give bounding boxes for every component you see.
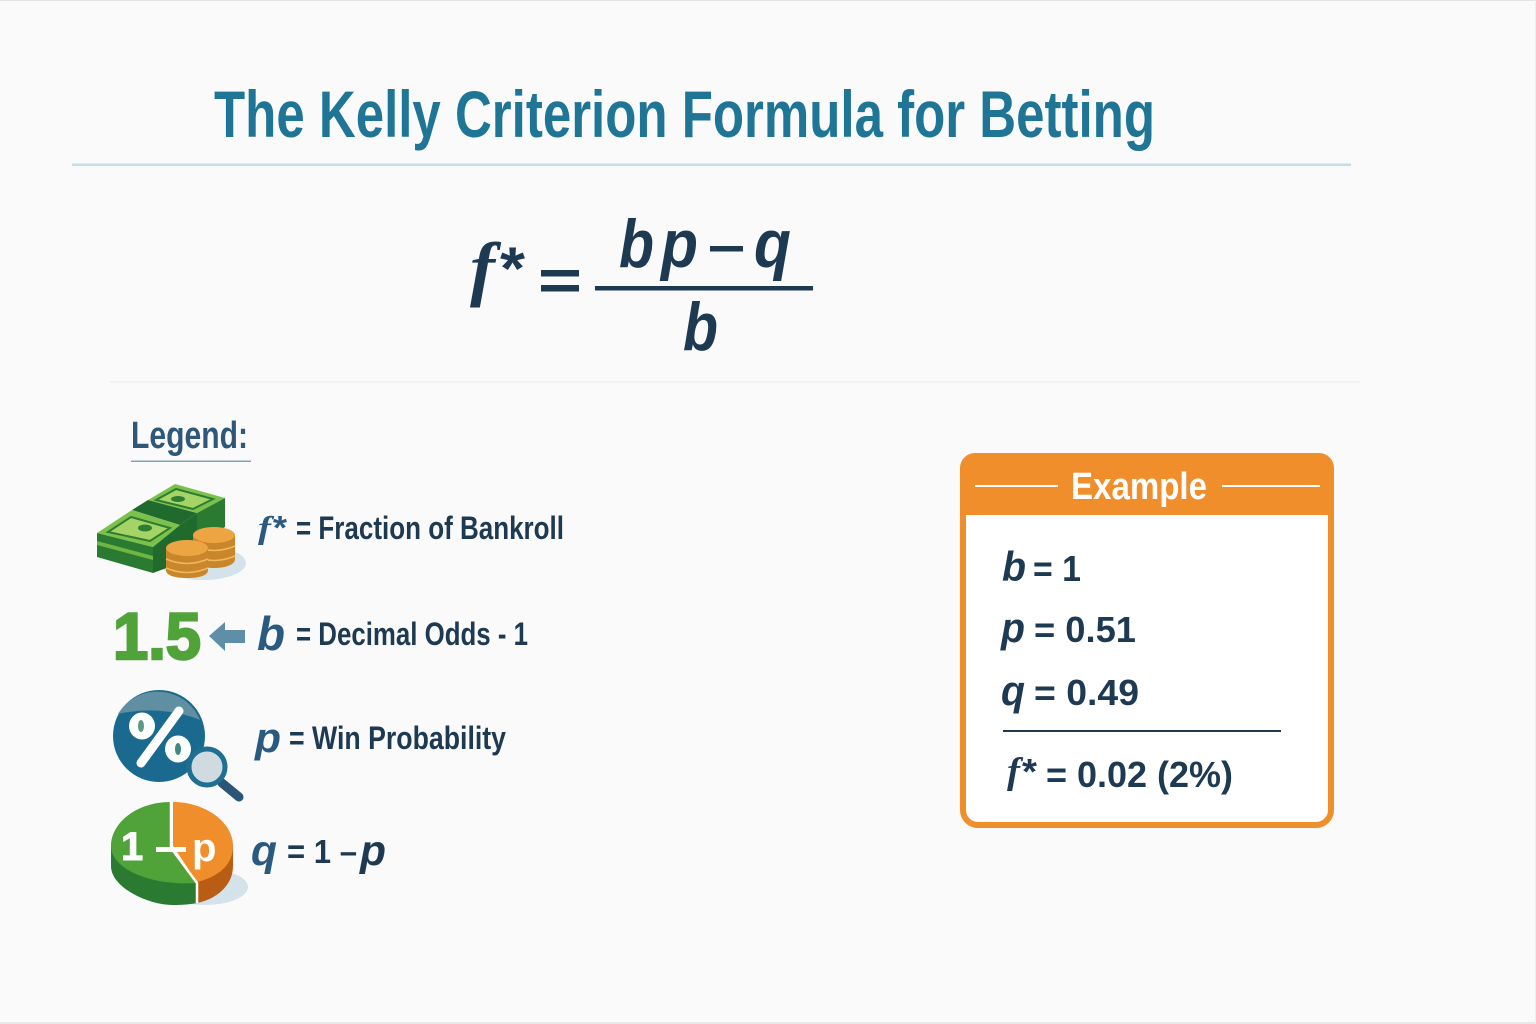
example values: = 1 <box>1033 548 1081 589</box>
legend item: b: = Decimal Odds - 1 <box>296 616 528 652</box>
legend item: b: b <box>257 607 285 660</box>
legend item: f*: f <box>258 509 275 545</box>
legend heading: Legend: <box>131 415 248 457</box>
example values: f <box>1007 751 1024 792</box>
formula: b <box>619 206 654 282</box>
legend item: p <box>254 714 506 761</box>
formula: p <box>659 206 698 282</box>
example values <box>1000 543 1281 795</box>
front bundle <box>97 510 180 547</box>
icon: money stack and coins <box>97 484 246 580</box>
legend item: q: = 1 – <box>287 833 357 870</box>
example values: q <box>1001 667 1025 714</box>
panel: example <box>960 453 1334 825</box>
legend item: f*: = Fraction of Bankroll <box>296 510 564 546</box>
formula: q <box>754 206 791 282</box>
formula: b <box>683 289 718 365</box>
rear bundle <box>132 500 197 525</box>
legend item: p: = Win Probability <box>289 720 506 756</box>
example values: = 0.02 (2%) <box>1046 754 1233 795</box>
example values: * <box>1022 751 1037 792</box>
formula: * <box>500 235 526 302</box>
legend item: f*: * <box>273 509 287 546</box>
icon: 1-p pie: p <box>192 826 216 870</box>
icon: 1-p pie <box>111 802 248 905</box>
example header <box>960 453 1334 515</box>
example values: p <box>1000 604 1025 651</box>
legend item: q <box>251 827 386 875</box>
example values: = 0.49 <box>1034 672 1139 713</box>
legend item: q: p <box>359 827 386 875</box>
icon: percent with magnifier <box>113 690 239 797</box>
example values: b <box>1002 543 1026 590</box>
legend item: q: q <box>251 827 277 875</box>
example header: Example <box>1071 466 1207 508</box>
icon: 1.5 with arrow <box>113 599 245 673</box>
icon: 1-p pie: 1 <box>121 825 143 869</box>
icon: 1.5 with arrow: 1.5 <box>113 599 201 673</box>
title: The Kelly Criterion Formula for Betting <box>214 77 1155 151</box>
formula: f <box>470 228 501 308</box>
legend item: b <box>257 607 528 660</box>
example values: = 0.51 <box>1034 609 1136 650</box>
legend item: p: p <box>254 714 281 761</box>
coins <box>193 535 235 568</box>
formula <box>470 206 813 365</box>
